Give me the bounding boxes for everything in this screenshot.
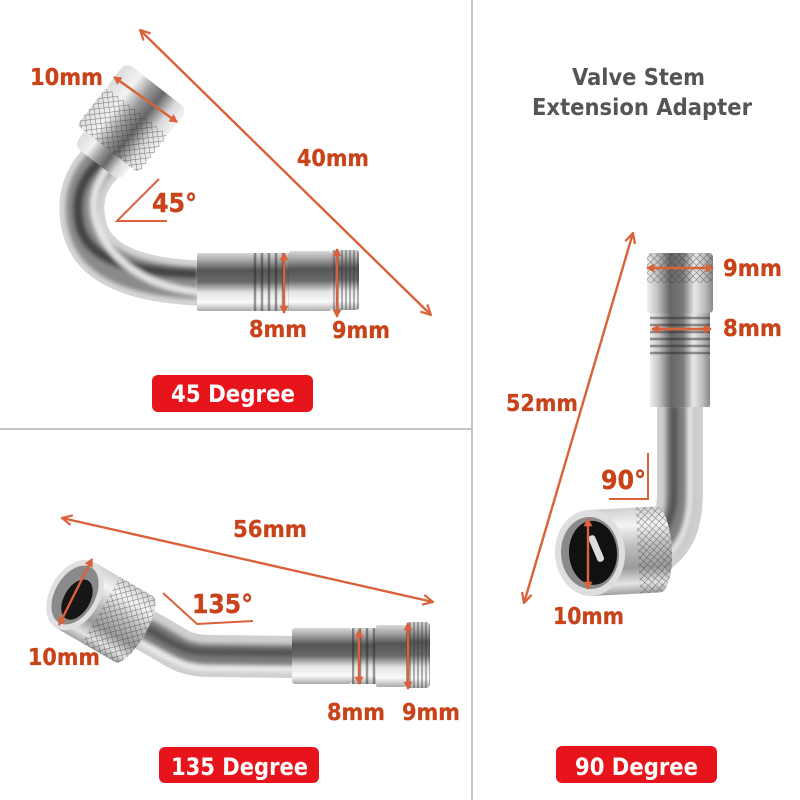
dimension arrow: 9mm	[407, 623, 409, 689]
panel: 135 degree adapter	[28, 517, 460, 783]
title	[532, 65, 753, 121]
label: 90 degrees: 90°	[601, 466, 646, 496]
badge: 45 Degree	[152, 375, 313, 412]
dimension arrow: 10mm	[587, 519, 589, 589]
badge: 45 Degree: 45 Degree	[171, 380, 295, 408]
label: 10mm: 10mm	[28, 645, 100, 671]
badge: 90 Degree: 90 Degree	[575, 753, 698, 781]
badge: 90 Degree	[556, 746, 717, 783]
dimension arrow: 8mm	[283, 253, 285, 313]
label: 9mm: 9mm	[402, 700, 460, 726]
title: Extension Adapter	[532, 95, 753, 121]
label: 45 degrees: 45°	[152, 189, 197, 219]
dimension arrow: 8mm	[652, 328, 711, 330]
vertical divider	[471, 0, 473, 800]
valve photo: 45 degree	[66, 62, 359, 311]
dimension arrow: 52mm	[524, 233, 633, 603]
badge: 135 Degree: 135 Degree	[171, 753, 308, 781]
label: 10mm: 10mm	[30, 65, 103, 91]
label: 10mm: 10mm	[553, 604, 624, 630]
dimension arrow: 40mm	[140, 30, 431, 315]
angle mark: 90	[609, 453, 648, 499]
label: 8mm: 8mm	[723, 316, 782, 342]
angle mark: 135	[163, 593, 253, 624]
label: 9mm: 9mm	[332, 318, 390, 344]
dimension arrow: 10mm	[59, 559, 92, 625]
panel: 45 degree adapter	[30, 30, 431, 412]
valve photo: 135 degree	[34, 550, 430, 688]
dimension arrow: 9mm	[647, 267, 713, 269]
panel: 90 degree adapter	[506, 233, 782, 783]
label: 40mm: 40mm	[297, 146, 369, 172]
label: 8mm: 8mm	[327, 700, 385, 726]
title: Valve Stem	[572, 65, 705, 91]
horizontal divider	[0, 428, 472, 430]
label: 8mm: 8mm	[249, 317, 307, 343]
label: 9mm: 9mm	[723, 256, 782, 282]
label: 52mm: 52mm	[506, 391, 578, 417]
label: 135 degrees: 135°	[192, 590, 253, 620]
angle mark: 45	[117, 179, 167, 221]
label: 56mm: 56mm	[233, 517, 307, 543]
dimension arrow: 9mm	[336, 249, 338, 317]
dimension arrow: 56mm	[62, 518, 433, 602]
dimension arrow: 10mm	[114, 77, 177, 122]
valve photo: 90 degree	[553, 253, 713, 598]
badge: 135 Degree	[159, 747, 319, 783]
dimension arrow: 8mm	[358, 630, 360, 684]
